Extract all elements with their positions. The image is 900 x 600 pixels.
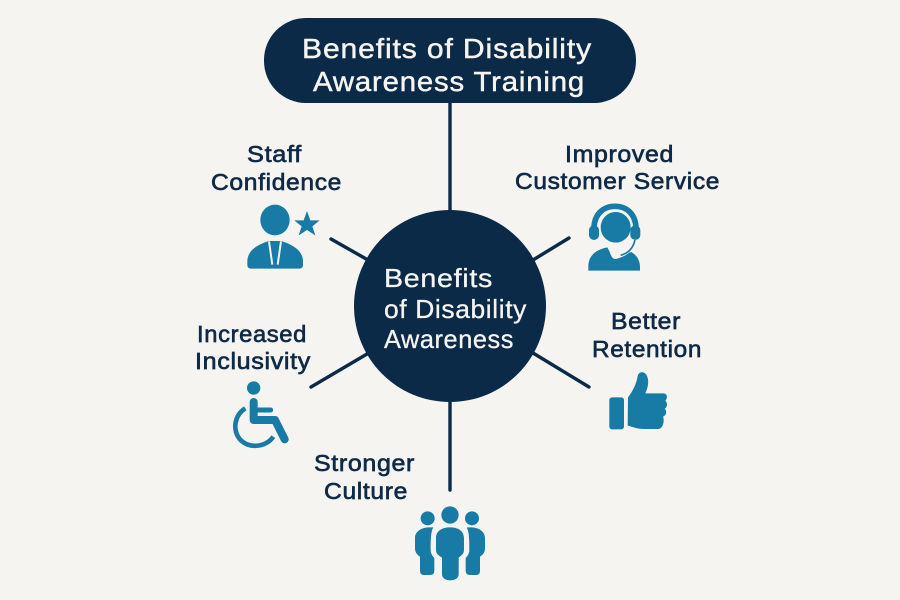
label: staff confidence	[211, 141, 342, 195]
label: increased inclusivity: Increased	[197, 321, 307, 347]
icon: headset agent	[588, 206, 640, 271]
central circle: of Disability	[384, 294, 527, 324]
label: increased inclusivity	[195, 321, 311, 374]
title pill: Awareness Training	[313, 66, 585, 97]
title pill: Benefits of Disability	[302, 33, 592, 64]
label: improved customer service: Customer Service	[515, 168, 720, 194]
icon: group of people	[415, 506, 485, 580]
icon: thumbs up	[609, 372, 667, 429]
label: staff confidence: Confidence	[211, 169, 342, 195]
central circle: Awareness	[384, 324, 514, 354]
label: stronger culture: Culture	[324, 478, 408, 504]
label: improved customer service: Improved	[565, 141, 674, 167]
label: stronger culture	[314, 450, 415, 504]
icon: person with star	[247, 205, 320, 269]
label: staff confidence: Staff	[247, 141, 302, 167]
icon: wheelchair	[235, 381, 285, 446]
label: increased inclusivity: Inclusivity	[195, 348, 311, 374]
label: better retention	[592, 308, 702, 362]
central circle: Benefits	[384, 263, 493, 293]
label: better retention: Better	[611, 308, 681, 334]
central circle	[354, 210, 546, 402]
label: better retention: Retention	[592, 336, 702, 362]
label: stronger culture: Stronger	[314, 450, 415, 476]
title pill	[264, 18, 636, 103]
connector lines	[311, 100, 589, 490]
label: improved customer service	[515, 141, 720, 194]
